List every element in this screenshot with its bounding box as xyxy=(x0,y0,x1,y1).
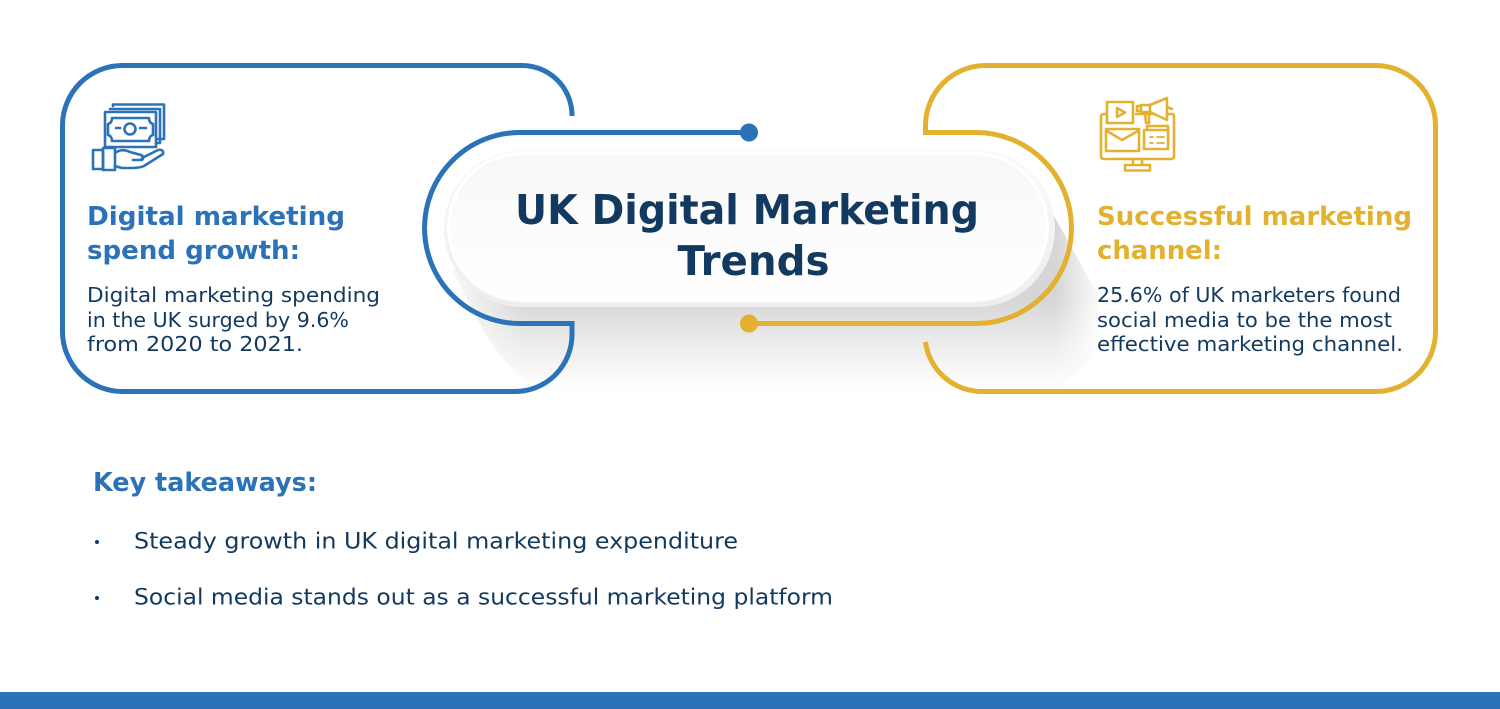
text block: spend growth description xyxy=(87,283,380,356)
text block: spend growth description: from 2020 to 2021. xyxy=(87,332,303,356)
heading: successful marketing channel: channel: xyxy=(1097,236,1222,266)
bullet list: takeaways: Social media stands out as a successful marketing platform xyxy=(134,586,833,610)
heading: digital marketing spend growth: spend growth: xyxy=(87,236,300,266)
icon: digital channels monitor xyxy=(1101,98,1174,170)
bullet list: takeaways: Steady growth in UK digital marketing expenditure xyxy=(134,530,738,554)
icon: money in hand xyxy=(93,104,164,170)
connector dot: yellow xyxy=(740,314,758,332)
footer bar xyxy=(0,692,1500,709)
heading: key takeaways: Key takeaways: xyxy=(93,468,317,498)
text block: channel description xyxy=(1097,283,1403,356)
bullet list: takeaways xyxy=(95,530,833,610)
heading: digital marketing spend growth: Digital marketing xyxy=(87,202,345,232)
central title pill xyxy=(444,150,1055,307)
pill cast shadow xyxy=(452,200,1105,395)
heading: successful marketing channel: Successful marketing xyxy=(1097,202,1412,232)
text block: channel description: effective marketing channel. xyxy=(1097,332,1403,356)
panel: successful channel outline xyxy=(755,66,1436,392)
heading: digital marketing spend growth xyxy=(87,202,345,266)
heading: successful marketing channel xyxy=(1097,202,1412,266)
panel: digital marketing spend outline xyxy=(62,65,742,392)
text block: channel description: 25.6% of UK marketers found xyxy=(1097,283,1401,307)
text block: channel description: social media to be the most xyxy=(1097,308,1392,332)
title second line: Trends xyxy=(678,237,830,285)
text block: spend growth description: in the UK surged by 9.6% xyxy=(87,308,349,332)
text block: spend growth description: Digital marketing spending xyxy=(87,283,380,307)
title: UK Digital Marketing xyxy=(515,186,979,234)
connector dot: blue xyxy=(740,124,758,142)
